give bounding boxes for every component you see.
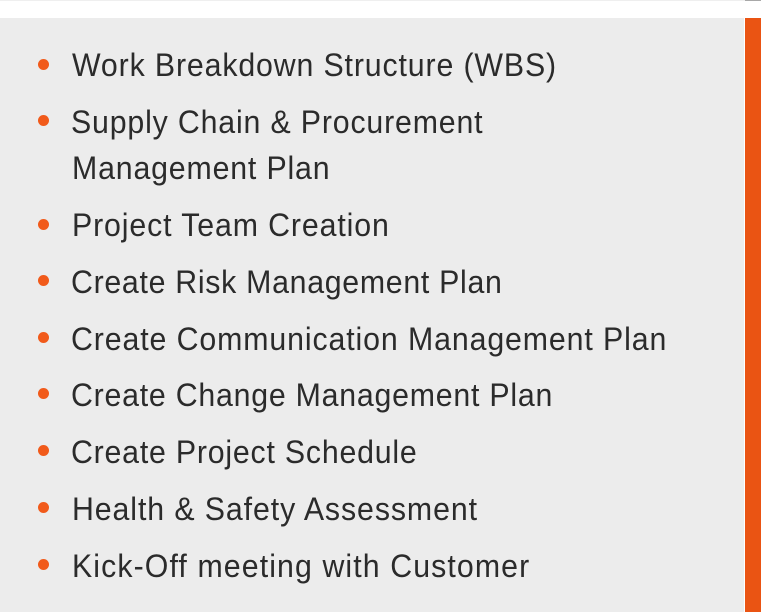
bullet: Create Project Schedule: Create Project Schedule bbox=[71, 434, 418, 470]
bullet: Create Risk Management Plan: Create Risk Management Plan bbox=[71, 264, 503, 300]
top white strip bbox=[0, 0, 761, 18]
bullet: Create Communication Management Plan: Create Communication Management Plan bbox=[71, 321, 667, 357]
orange side bar bbox=[745, 18, 761, 612]
bullet: Create Change Management Plan: Create Change Management Plan bbox=[71, 377, 553, 413]
bullet: Supply Chain and Procurement Management Plan: Supply Chain & Procurement bbox=[71, 104, 483, 140]
bullet: Health and Safety Assessment: Health & Safety Assessment bbox=[72, 491, 478, 527]
bullet: Project Team Creation: Project Team Creation bbox=[72, 207, 390, 243]
bullet: Supply Chain and Procurement Management Plan: Management Plan bbox=[72, 150, 330, 186]
bullet: Work Breakdown Structure: Work Breakdown Structure (WBS) bbox=[72, 47, 557, 83]
bullet: Kick-Off meeting with Customer: Kick-Off meeting with Customer bbox=[72, 548, 530, 584]
bullet: Supply Chain and Procurement Management Plan bbox=[38, 104, 483, 186]
small grey tab at top right bbox=[745, 0, 761, 1]
